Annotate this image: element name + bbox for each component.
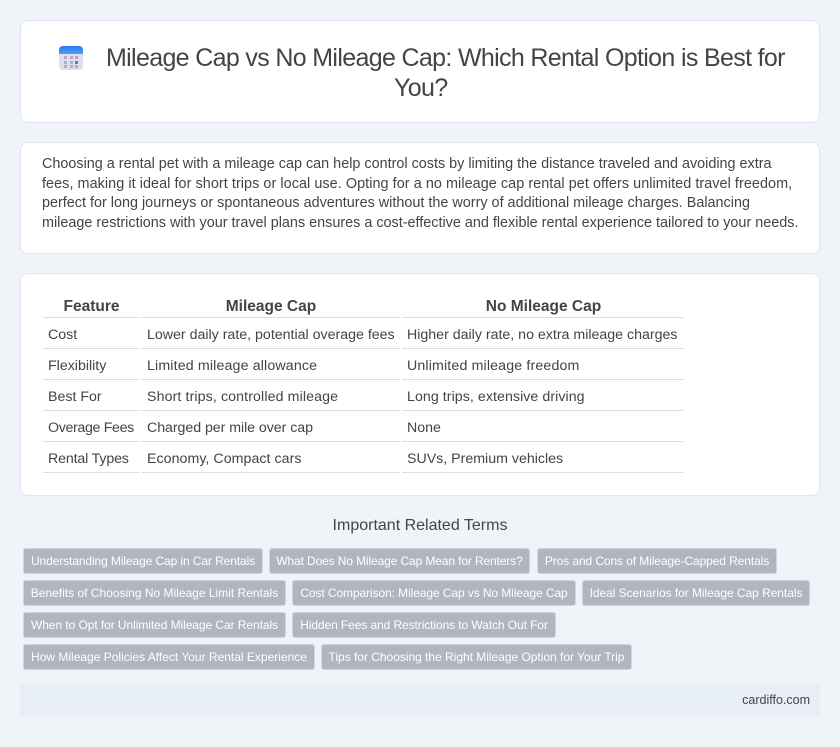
table header: Mileage Cap [226,298,316,315]
tag list: Understanding Mileage Cap in Car Rentals [31,554,255,568]
row: rental types: Economy, Compact cars [147,451,302,467]
row: cost [48,327,678,343]
title [106,44,786,102]
footer source text: cardiffo.com [742,693,810,707]
panel: header [20,20,820,123]
row: cost: Cost [48,327,77,343]
row: overage fees [48,420,441,436]
tag list: Benefits of Choosing No Mileage Limit Rentals [31,586,278,600]
tag list: Hidden Fees and Restrictions to Watch Out For [300,618,548,632]
panel: intro text [20,142,820,254]
text block: intro: fees, making it ideal for short trips or local use. Opting for a no mileage cap rental pet offers unlimited travel freedom, [42,176,792,192]
panel: comparison table [20,273,820,496]
row: best for: Long trips, extensive driving [407,389,585,405]
row: rental types: Rental Types [48,451,129,467]
text block: intro [42,156,798,230]
row: flexibility: Unlimited mileage freedom [407,358,580,374]
row: cost: Lower daily rate, potential overage fees [147,327,395,343]
heading: important related terms: Important Related Terms [333,517,507,534]
row: best for: Best For [48,389,102,405]
text block: intro: perfect for long journeys or spontaneous adventures without the worry of additional mileage charges. Balancing [42,195,750,211]
row: overage fees: Overage Fees [48,420,134,436]
table header: Feature [64,298,120,315]
row: rental types [48,451,563,467]
tag list: How Mileage Policies Affect Your Rental Experience [31,650,307,664]
footer [20,683,820,717]
tag list: Pros and Cons of Mileage-Capped Rentals [545,554,769,568]
row: overage fees: Charged per mile over cap [147,420,313,436]
row: cost: Higher daily rate, no extra mileage charges [407,327,678,343]
row: overage fees: None [407,420,441,436]
row: flexibility: Limited mileage allowance [147,358,317,374]
table header: No Mileage Cap [486,298,601,315]
icon: calendar [59,46,83,70]
row: flexibility [48,358,580,374]
text block: intro: mileage restrictions with your travel plans ensures a cost-effective and flexible rental experience tailored to your needs. [42,214,798,230]
tag list: Cost Comparison: Mileage Cap vs No Mileage Cap [300,586,568,600]
title: You? [394,74,447,102]
title: Mileage Cap vs No Mileage Cap: Which Rental Option is Best for [106,44,785,72]
row: flexibility: Flexibility [48,358,106,374]
table header [64,298,601,315]
tag list: Ideal Scenarios for Mileage Cap Rentals [590,586,802,600]
tag list: Tips for Choosing the Right Mileage Option for Your Trip [329,650,624,664]
row: best for [48,389,585,405]
row: rental types: SUVs, Premium vehicles [407,451,563,467]
tag list [23,548,810,670]
text block: intro: Choosing a rental pet with a mileage cap can help control costs by limiting the distance traveled and avoiding extra [42,156,772,172]
row: best for: Short trips, controlled mileage [147,389,338,405]
tag list: What Does No Mileage Cap Mean for Renters? [276,554,523,568]
tag list: When to Opt for Unlimited Mileage Car Rentals [31,618,278,632]
